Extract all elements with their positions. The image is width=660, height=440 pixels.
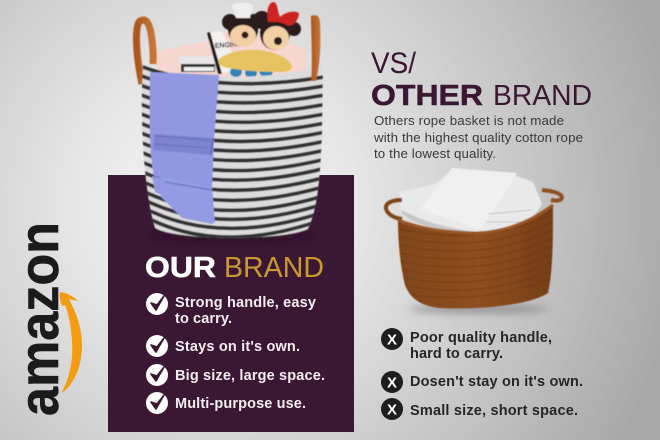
feature: strong handle: to carry. [175, 311, 232, 327]
left leather handle [136, 20, 153, 84]
drawback list: other brand [381, 328, 583, 420]
icon: amazon arrow [60, 292, 82, 393]
striped rope basket with contents [135, 2, 330, 245]
drawback: poor handle: Poor quality handle, [410, 330, 552, 346]
heading: vs other brand: BRAND [493, 80, 592, 112]
rope body [397, 206, 554, 310]
icon: x 3 [381, 398, 403, 420]
icon: check 4 [146, 392, 168, 414]
drawback: poor handle: hard to carry. [410, 346, 503, 362]
rope body [141, 64, 324, 238]
description: other brand: Others rope basket is not made [374, 113, 564, 128]
plush: minnie [253, 2, 301, 50]
icon: check 1 [146, 293, 168, 315]
blue towel [150, 72, 219, 224]
drawback: poor handle [410, 330, 552, 362]
feature: big size: Big size, large space. [175, 368, 325, 384]
feature: strong handle [175, 295, 316, 327]
icon: check 3 [146, 364, 168, 386]
basket handle left [386, 200, 402, 219]
description: other brand: with the highest quality cotton rope [373, 130, 583, 145]
feature: multi-purpose: Multi-purpose use. [175, 396, 306, 412]
icon: x 1: X [387, 332, 397, 348]
icon: check 2 [146, 335, 168, 357]
brown rope basket with towels [386, 168, 562, 315]
heading: our brand: BRAND [224, 252, 324, 284]
drawback: does not stay: Dosen't stay on it's own. [410, 374, 583, 390]
book: ENGINE [215, 41, 242, 50]
heading: vs other brand [371, 47, 592, 112]
plush: feet [230, 65, 273, 78]
pink blanket [153, 30, 306, 78]
feature: strong handle: Strong handle, easy [175, 295, 316, 311]
icon: x 3: X [387, 402, 397, 418]
feature list: our brand [146, 293, 325, 414]
icon: x 2: X [387, 374, 397, 392]
heading: our brand: OUR [145, 252, 216, 284]
basket handle right [542, 190, 562, 201]
heading: vs other brand: VS/ [371, 47, 417, 80]
book stack [179, 56, 215, 72]
panel: our brand [108, 175, 354, 432]
icon: x 1 [381, 328, 403, 350]
right leather handle [311, 15, 320, 81]
plush: mickey [222, 3, 262, 47]
book [207, 31, 242, 74]
heading: vs other brand: OTHER [371, 80, 483, 112]
description: other brand [373, 113, 583, 161]
logo: amazon: amazon [7, 222, 70, 416]
feature: stays on its own: Stays on it's own. [175, 339, 300, 355]
description: other brand: to the lowest quality. [374, 146, 496, 161]
basket rim [398, 205, 553, 233]
plush: bread [218, 50, 292, 72]
icon: x 2 [381, 371, 403, 393]
heading: our brand [145, 252, 324, 284]
white towels [399, 168, 542, 235]
drawback: small size: Small size, short space. [410, 403, 578, 419]
